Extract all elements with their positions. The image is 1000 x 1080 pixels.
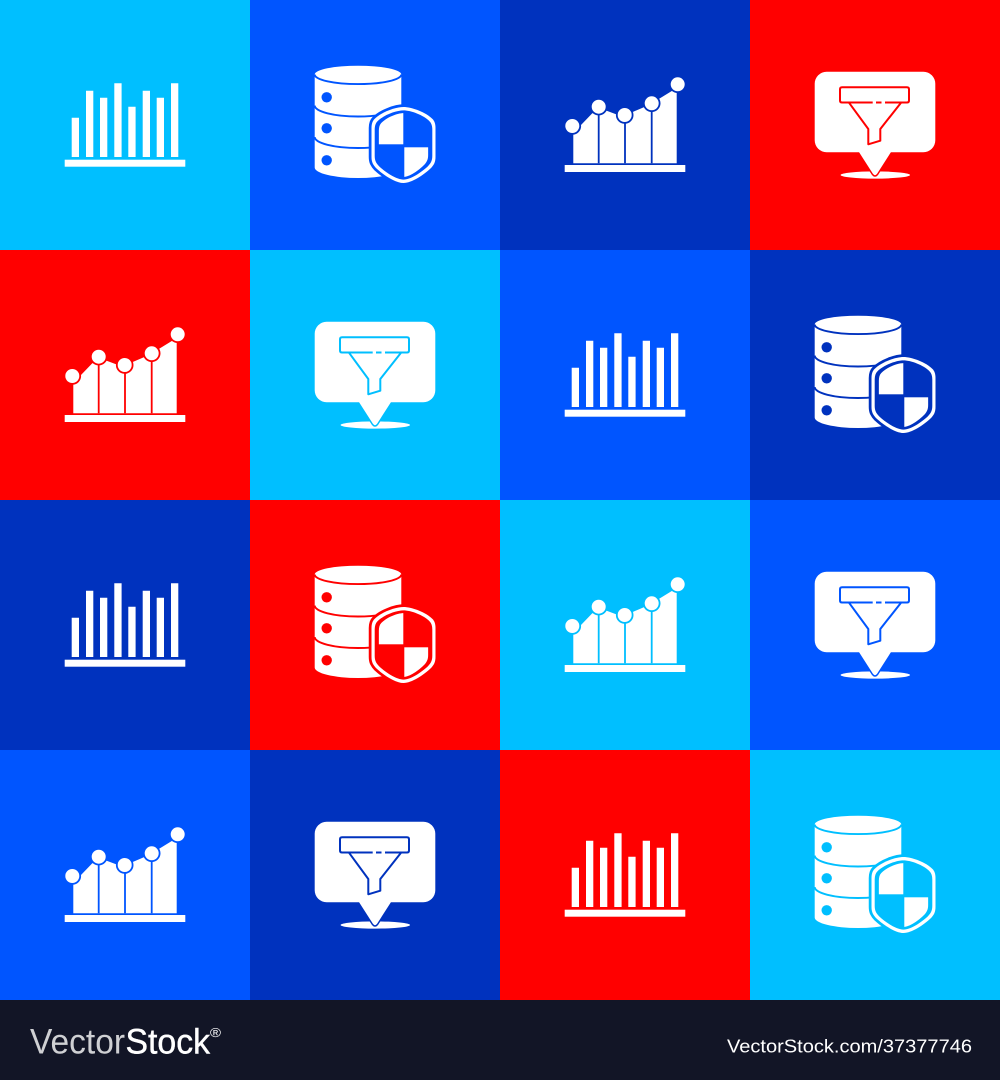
tile row 1 col 4: funnel pin on red — [750, 0, 1000, 250]
tile row 2 col 2: funnel pin on light blue — [250, 250, 500, 500]
tile row 3 col 2: database shield on red — [250, 500, 500, 750]
tile row 4 col 4: database shield on light blue — [750, 750, 1000, 1000]
tile row 4 col 1: line chart on blue — [0, 750, 250, 1000]
footer bar — [0, 1000, 1000, 1080]
VectorStock logo: Vector — [30, 1022, 125, 1062]
VectorStock logo: Stock — [126, 1022, 210, 1062]
tile row 4 col 2: funnel pin on dark blue — [250, 750, 500, 1000]
tile row 4 col 3: bar chart on red — [500, 750, 750, 1000]
tile row 2 col 3: bar chart on blue — [500, 250, 750, 500]
tile row 2 col 1: line chart on red — [0, 250, 250, 500]
tile row 1 col 3: line chart on dark blue — [500, 0, 750, 250]
tile row 3 col 4: funnel pin on blue — [750, 500, 1000, 750]
tile row 3 col 1: bar chart on dark blue — [0, 500, 250, 750]
tile row 1 col 2: database shield on blue — [250, 0, 500, 250]
tile row 2 col 4: database shield on dark blue — [750, 250, 1000, 500]
VectorStock logo: ® — [210, 1025, 221, 1040]
VectorStock logo — [30, 1022, 221, 1062]
tile row 1 col 1: bar chart on light blue — [0, 0, 250, 250]
image id caption: VectorStock.com/37377746 — [727, 1036, 972, 1057]
tile row 3 col 3: line chart on light blue — [500, 500, 750, 750]
